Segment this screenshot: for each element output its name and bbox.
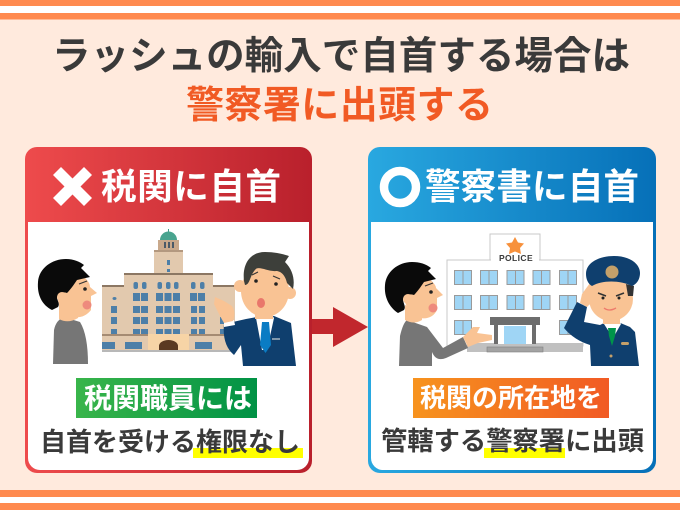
police sign: POLICE bbox=[499, 253, 533, 263]
bottom stripes bbox=[0, 490, 680, 510]
highlight: customs bbox=[193, 448, 303, 458]
illustration: man in sweater bbox=[38, 259, 97, 364]
illustration: man gesturing bbox=[385, 262, 492, 366]
illustration: police station bbox=[447, 234, 583, 352]
icon: cross bbox=[53, 167, 92, 206]
icon: circle bbox=[384, 171, 416, 203]
illustration: police officer bbox=[564, 256, 640, 366]
sublabel: customs location: 税関の所在地を bbox=[420, 383, 602, 413]
highlight: police bbox=[484, 448, 565, 458]
sublabel: customs officer: 税関職員には bbox=[84, 383, 252, 414]
title: ラッシュの輸入で自首する場合は bbox=[52, 35, 630, 78]
arched windows bbox=[134, 282, 204, 289]
arrow bbox=[310, 307, 368, 347]
title: 警察署に出頭する bbox=[186, 85, 493, 127]
illustration: customs building bbox=[102, 229, 235, 352]
title bbox=[52, 35, 630, 127]
panel: customs (wrong) bbox=[25, 147, 312, 473]
panel: police (right) bbox=[368, 147, 656, 473]
windows bbox=[454, 270, 576, 334]
heading: customs: 税関に自首 bbox=[101, 167, 281, 207]
heading: police: 警察書に自首 bbox=[425, 167, 639, 207]
text: report to police: 管轄する警察署に出頭 bbox=[381, 426, 645, 456]
sublabel: customs location bbox=[413, 378, 609, 418]
window grid bbox=[111, 293, 225, 334]
icon: star bbox=[506, 237, 524, 254]
top stripes bbox=[0, 0, 680, 20]
text: no authority: 自首を受ける権限なし bbox=[40, 427, 300, 457]
illustration: customs officer bbox=[214, 252, 296, 366]
